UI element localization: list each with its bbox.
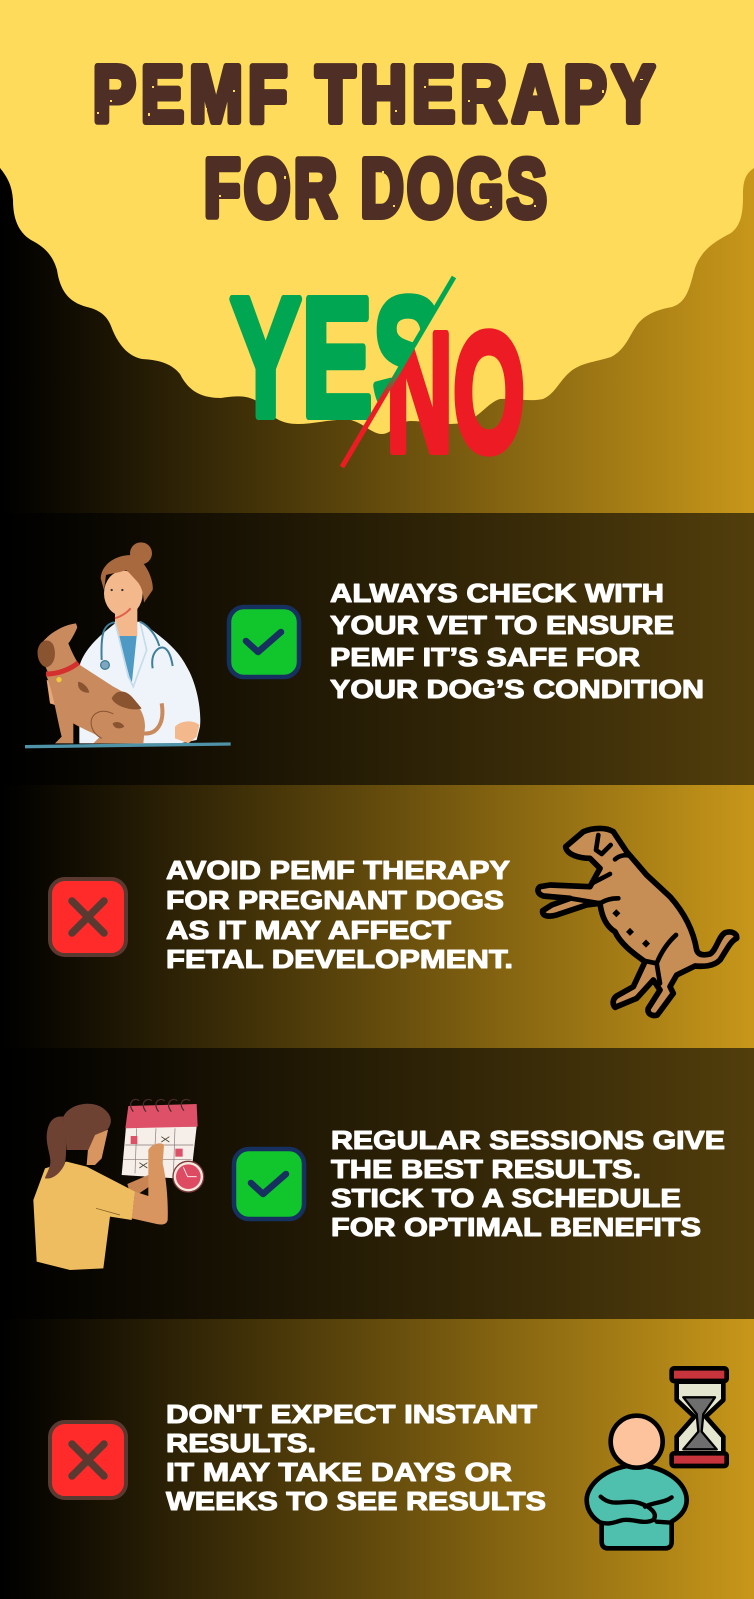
text: no instant results [166, 1399, 546, 1516]
illustration: woman with calendar [33, 1099, 204, 1270]
text: avoid therapy: FOR PREGNANT DOGS [166, 885, 504, 915]
text: no instant results: RESULTS. [166, 1428, 316, 1458]
panel: check with vet [0, 513, 754, 785]
title: FOR DOGS [204, 143, 547, 235]
panel: regular sessions [0, 1048, 754, 1319]
panel: header [0, 0, 754, 513]
title: PEMF THERAPY [93, 50, 655, 139]
text: avoid therapy: AVOID PEMF THERAPY [166, 855, 510, 885]
text: no instant results: IT MAY TAKE DAYS OR [166, 1457, 512, 1487]
scalloped yellow shape [0, 0, 754, 434]
illustration: pregnant dog [538, 828, 737, 1015]
panel: no instant results [0, 1319, 754, 1599]
band background [0, 513, 754, 785]
text: avoid therapy [166, 855, 513, 974]
text: regular sessions: THE BEST RESULTS. [331, 1154, 641, 1184]
band background [0, 1319, 754, 1599]
icon: red cross [50, 1422, 126, 1498]
yes/no graphic: NO [386, 298, 525, 488]
text: regular sessions: FOR OPTIMAL BENEFITS [331, 1212, 701, 1242]
text: no instant results: WEEKS TO SEE RESULTS [166, 1486, 546, 1516]
text: check with vet: ALWAYS CHECK WITH [330, 578, 664, 608]
text: check with vet: YOUR DOG’S CONDITION [330, 674, 704, 704]
icon: green check [229, 607, 299, 677]
icon: red cross [50, 879, 126, 955]
band background [0, 1048, 754, 1319]
text: regular sessions: STICK TO A SCHEDULE [331, 1183, 681, 1213]
text: regular sessions: REGULAR SESSIONS GIVE [331, 1125, 725, 1155]
illustration: person and hourglass [587, 1368, 727, 1548]
text: no instant results: DON'T EXPECT INSTANT [166, 1399, 537, 1429]
text: avoid therapy: FETAL DEVELOPMENT. [166, 944, 513, 974]
title [93, 50, 655, 235]
text: regular sessions [331, 1125, 725, 1242]
text: check with vet: YOUR VET TO ENSURE [330, 610, 674, 640]
text: check with vet [330, 578, 704, 704]
illustration: vet and dog [25, 542, 231, 747]
yes/no graphic: YES [230, 263, 444, 453]
text: avoid therapy: AS IT MAY AFFECT [166, 915, 451, 945]
text: check with vet: PEMF IT’S SAFE FOR [330, 642, 640, 672]
panel: avoid for pregnant dogs [0, 785, 754, 1048]
header gradient background [0, 0, 754, 513]
band background [0, 785, 754, 1048]
icon: green check [234, 1149, 304, 1219]
